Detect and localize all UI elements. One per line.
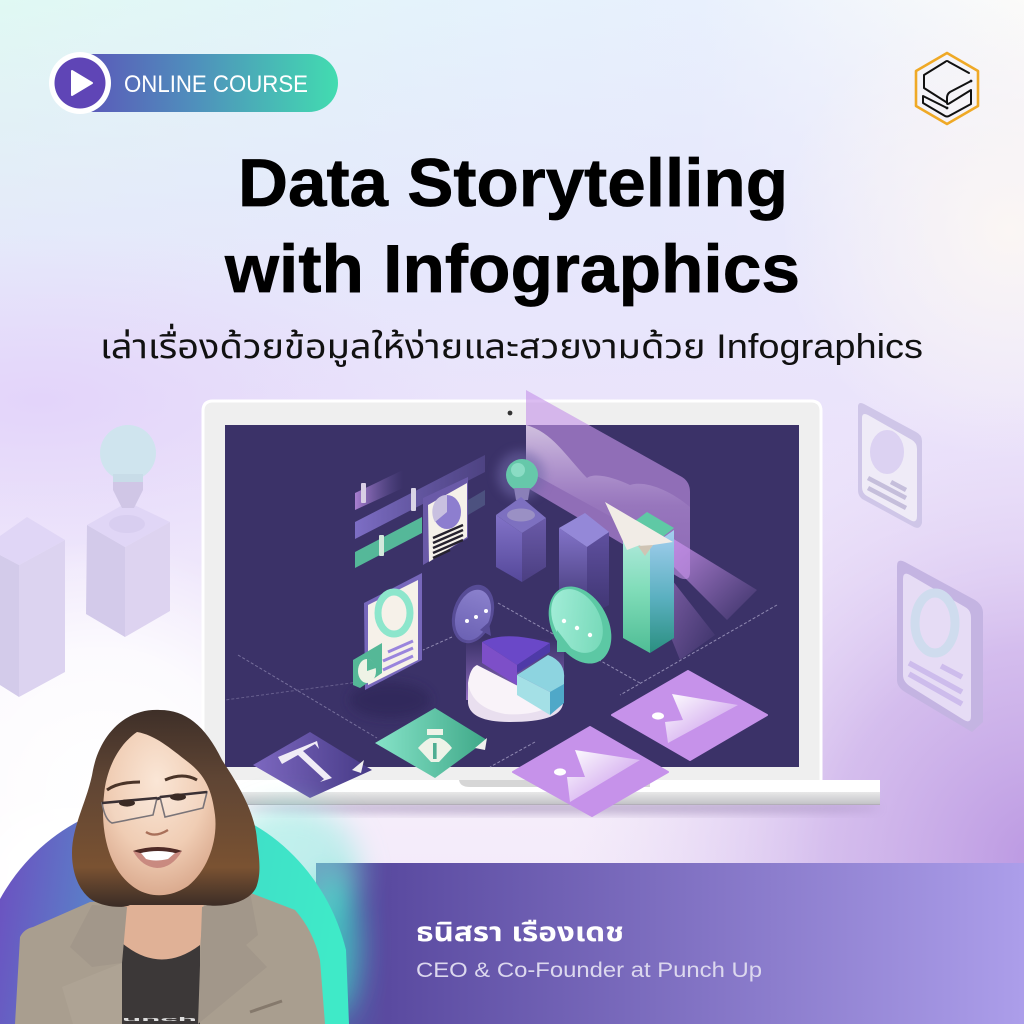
title: [224, 145, 800, 307]
text card: [253, 732, 372, 798]
glow behind portrait: [0, 805, 360, 1017]
subtitle: เล่าเรื่องด้วยข้อมูลให้ง่ายและสวยงามด้วย Infographics: [100, 323, 923, 367]
ghost document top right: [858, 403, 922, 528]
middle pillar: [559, 513, 609, 617]
ghost document lower right: [897, 561, 983, 732]
ghost isometric boxes with lightbulb: [0, 425, 170, 697]
logo: hexagon: [916, 53, 978, 124]
title: with Infographics: [224, 231, 800, 307]
floor grid lines: [225, 603, 777, 767]
speech bubble purple: [445, 579, 501, 649]
document with pie chart: [423, 477, 468, 565]
portrait circle: [0, 800, 349, 1024]
title: Data Storytelling: [238, 145, 788, 221]
lightbulb on pillar: [496, 451, 546, 582]
presenter portrait: [15, 710, 325, 1024]
pen tool card: [375, 708, 487, 778]
progress bars: [355, 455, 485, 568]
green pillar with paper plane: [605, 502, 674, 653]
floor shadow: [350, 682, 430, 718]
image card left: [513, 727, 668, 816]
image card right: [612, 671, 767, 760]
speech bubble green: [536, 576, 624, 674]
presenter name: ธนิสรา เรืองเดช: [416, 917, 624, 947]
laptop screen: [225, 425, 799, 767]
laptop: [203, 401, 880, 813]
presenter portrait: unch: [122, 1017, 197, 1023]
translucent wave panel: [526, 390, 690, 579]
document with donut chart: [353, 573, 422, 690]
isometric pie chart: [466, 636, 564, 722]
online course badge: [49, 52, 338, 114]
online course badge: ONLINE COURSE: [124, 71, 308, 98]
light beams: [672, 538, 757, 660]
presenter band: [316, 863, 1024, 1024]
presenter role: CEO & Co-Founder at Punch Up: [416, 959, 762, 982]
